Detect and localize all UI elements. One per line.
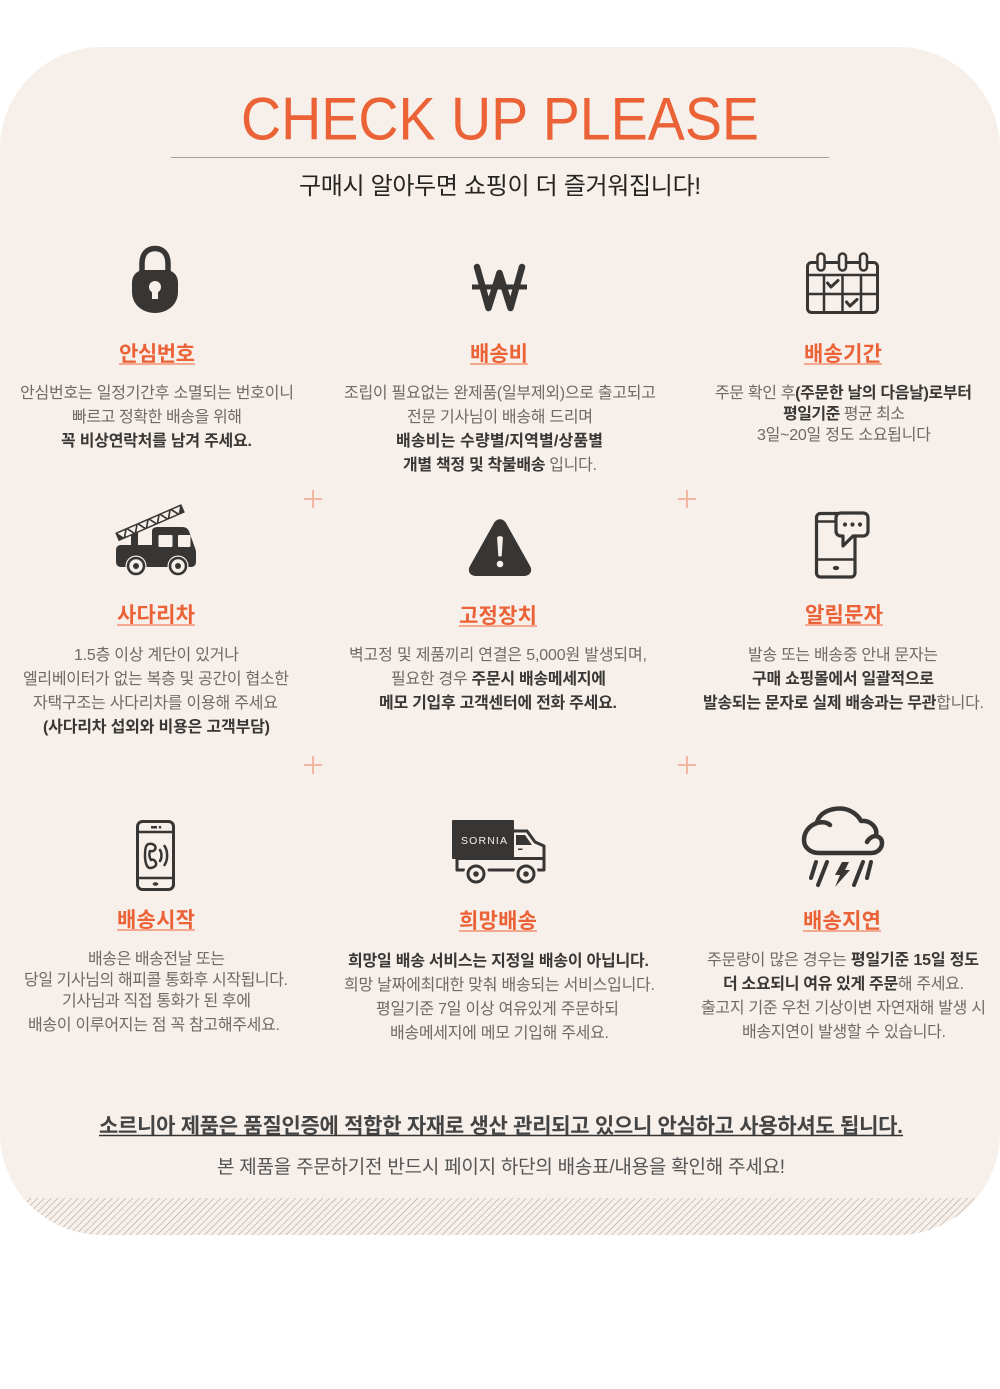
- text block: [344, 952, 655, 1042]
- text block: 벽고정 및 제품끼리 연결은 5,000원 발생되며,: [349, 646, 647, 664]
- text block: 빠르고 정확한 배송을 위해: [72, 408, 242, 426]
- icon: phone with speech bubble: [816, 513, 868, 577]
- text block: 배송지연이 발생할 수 있습니다.: [742, 1023, 946, 1041]
- text block: 더 소요되니 여유 있게 주문해 주세요.: [723, 975, 964, 993]
- footer notice: 소르니아 제품은 품질인증에 적합한 자재로 생산 관리되고 있으니 안심하고 사용하셔도 됩니다.: [99, 1115, 903, 1138]
- text block: 3일~20일 정도 소요됩니다: [757, 426, 931, 444]
- heading: 배송비: [470, 343, 528, 366]
- icon: storm cloud: [804, 808, 882, 887]
- text block: [703, 646, 984, 712]
- heading: 배송지연: [803, 910, 881, 933]
- text block: 평일기준 7일 이상 여유있게 주문하되: [376, 1000, 619, 1018]
- text block: 주문 확인 후(주문한 날의 다음날)로부터: [715, 384, 972, 402]
- heading: 배송기간: [804, 343, 882, 366]
- icon: delivery truck: [452, 820, 544, 886]
- footer notice: [99, 1115, 903, 1178]
- title: CHECK UP PLEASE: [241, 86, 759, 152]
- icon: warning triangle: [469, 519, 531, 576]
- text block: 출고지 기준 우천 기상이변 자연재해 발생 시: [701, 999, 986, 1017]
- icon: calendar: [808, 254, 878, 312]
- text block: [20, 384, 294, 450]
- text block: [24, 950, 288, 1034]
- plus marks: [304, 490, 696, 774]
- text block: 1.5층 이상 계단이 있거나: [74, 646, 239, 664]
- icon: delivery truck: SORNIA: [461, 835, 507, 847]
- text block: (사다리차 섭외와 비용은 고객부담): [43, 718, 270, 736]
- text block: 희망 날짜에최대한 맞춰 배송되는 서비스입니다.: [344, 976, 655, 994]
- icon: phone with call handset: [138, 822, 174, 890]
- text block: 발송되는 문자로 실제 배송과는 무관합니다.: [703, 694, 984, 712]
- text block: 조립이 필요없는 완제품(일부제외)으로 출고되고: [344, 384, 656, 402]
- text block: [715, 384, 972, 444]
- panel: 안심번호: [20, 248, 294, 450]
- panel: 배송지연: [701, 808, 986, 1041]
- text block: 필요한 경우 주문시 배송메세지에: [391, 670, 606, 688]
- panel: 고정장치: [349, 519, 647, 712]
- text block: 평일기준 평균 최소: [783, 405, 905, 423]
- icon: ladder truck: [115, 504, 196, 576]
- text block: 주문량이 많은 경우는 평일기준 15일 정도: [707, 951, 979, 969]
- text block: 당일 기사님의 해피콜 통화후 시작됩니다.: [24, 971, 288, 989]
- text block: 전문 기사님이 배송해 드리며: [407, 408, 593, 426]
- text block: [344, 384, 656, 474]
- panel: 배송시작: [24, 822, 288, 1034]
- panel: 알림문자: [703, 513, 984, 712]
- text block: 발송 또는 배송중 안내 문자는: [748, 646, 938, 664]
- heading: 사다리차: [117, 604, 195, 627]
- text block: 개별 책정 및 착불배송 입니다.: [403, 456, 597, 474]
- panel: 배송비: [344, 267, 656, 474]
- icon: padlock: [132, 248, 178, 313]
- text block: [349, 646, 647, 712]
- text block: 배송이 이루어지는 점 꼭 참고해주세요.: [28, 1016, 280, 1034]
- footer notice: 본 제품을 주문하기전 반드시 페이지 하단의 배송표/내용을 확인해 주세요!: [217, 1156, 785, 1178]
- subtitle: 구매시 알아두면 쇼핑이 더 즐거워집니다!: [299, 173, 701, 200]
- text block: 안심번호는 일정기간후 소멸되는 번호이니: [20, 384, 294, 402]
- text block: 기사님과 직접 통화가 된 후에: [62, 992, 251, 1010]
- text block: 구매 쇼핑몰에서 일괄적으로: [752, 670, 934, 688]
- text block: 배송비는 수량별/지역별/상품별: [396, 432, 603, 450]
- text block: 배송메세지에 메모 기입해 주세요.: [390, 1024, 609, 1042]
- text block: [23, 646, 289, 736]
- text block: 희망일 배송 서비스는 지정일 배송이 아닙니다.: [348, 952, 649, 970]
- panel: 사다리차: [23, 504, 289, 736]
- heading: 고정장치: [459, 605, 537, 628]
- heading: 배송시작: [117, 909, 195, 932]
- text block: 엘리베이터가 없는 복층 및 공간이 협소한: [23, 670, 289, 688]
- text block: 자택구조는 사다리차를 이용해 주세요: [33, 694, 278, 712]
- heading: 안심번호: [119, 343, 195, 366]
- icon: won sign: [472, 267, 527, 308]
- heading: 희망배송: [459, 910, 537, 933]
- text block: 꼭 비상연락처를 남겨 주세요.: [61, 432, 252, 450]
- heading: 알림문자: [805, 604, 883, 627]
- text block: 메모 기입후 고객센터에 전화 주세요.: [379, 694, 617, 712]
- panel: 배송기간: [715, 254, 972, 444]
- panel: 희망배송: [344, 820, 655, 1042]
- text block: 배송은 배송전날 또는: [88, 950, 225, 968]
- text block: [701, 951, 986, 1041]
